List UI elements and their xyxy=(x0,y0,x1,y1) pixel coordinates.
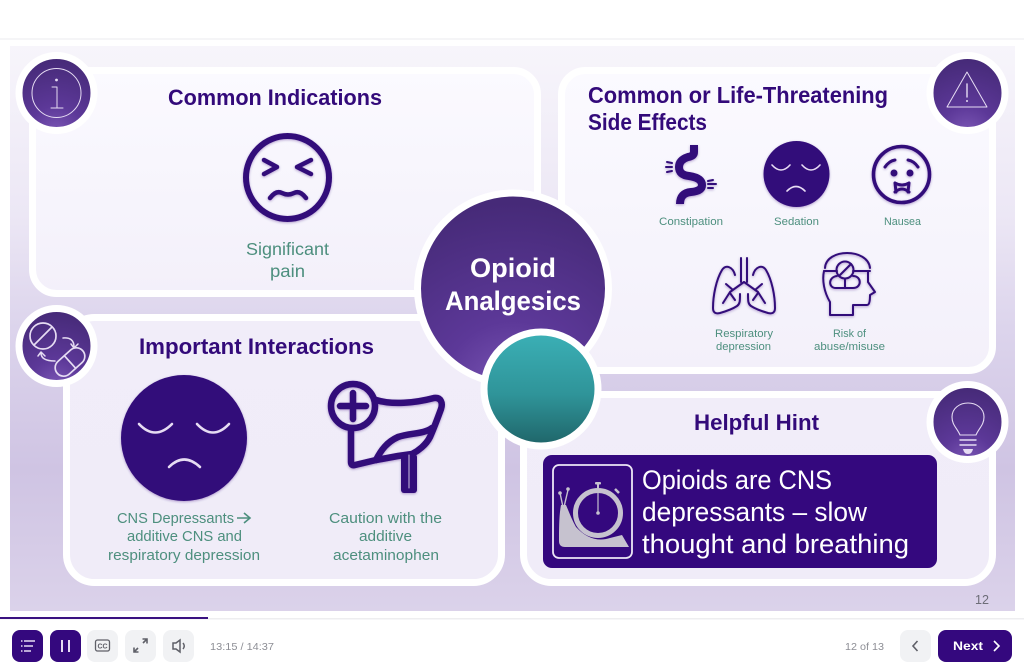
callout: hint box xyxy=(543,455,937,568)
button: next xyxy=(938,630,1012,662)
text: hint: thought and breathing xyxy=(642,529,909,559)
icon: liver with plus xyxy=(331,384,442,493)
text: CNS depressants xyxy=(108,510,260,564)
panel: helpful hint xyxy=(524,394,992,582)
text: acetaminophen caution: additive xyxy=(359,528,412,545)
heading: common indications: Common Indications xyxy=(168,85,382,110)
icon: pain face xyxy=(246,136,329,219)
text: significant pain: Significant xyxy=(246,239,329,259)
icon badge: information xyxy=(19,56,94,130)
labels: side effects xyxy=(659,216,922,353)
button: fullscreen xyxy=(125,630,156,662)
player controls xyxy=(12,630,1012,662)
heading: side effects xyxy=(588,82,888,135)
button: captions xyxy=(87,630,118,662)
top divider xyxy=(0,38,1024,40)
heading: helpful hint: Helpful Hint xyxy=(694,410,820,435)
panel: common indications xyxy=(32,70,538,294)
text: acetaminophen caution: acetaminophen xyxy=(333,547,439,564)
button: pause xyxy=(50,630,81,662)
icon badge: warning xyxy=(930,56,1005,130)
text: hint: Opioids are CNS xyxy=(642,465,832,495)
labels: side effects: Nausea xyxy=(884,216,922,228)
text: CNS depressants: CNS Depressants xyxy=(117,510,234,527)
icon badge: light bulb xyxy=(930,384,1005,460)
text: acetaminophen caution: Caution with the xyxy=(329,510,442,527)
text: significant pain: pain xyxy=(270,261,305,281)
labels: side effects: Risk of xyxy=(833,328,867,340)
button: previous xyxy=(900,630,931,662)
central circle: opioid analgesics xyxy=(418,193,608,384)
labels: side effects: Sedation xyxy=(774,216,819,228)
page counter: 12 of 13 xyxy=(845,641,884,653)
labels: side effects: Constipation xyxy=(659,216,723,228)
icon: lungs xyxy=(713,258,775,313)
teal circle xyxy=(484,332,598,446)
icon: snail stopwatch xyxy=(553,465,632,558)
button: next: Next xyxy=(953,639,983,653)
text: hint: depressants – slow xyxy=(642,497,868,527)
icon: sedation face xyxy=(764,141,830,207)
text: CNS depressants: respiratory depression xyxy=(108,547,260,564)
labels: side effects: Respiratory xyxy=(715,328,774,340)
button: menu xyxy=(12,630,43,662)
text: acetaminophen caution xyxy=(329,510,442,564)
panel: side effects xyxy=(562,70,992,370)
button: volume xyxy=(163,630,194,662)
timer: 13:15 / 14:37 xyxy=(210,641,274,653)
labels: side effects: depression xyxy=(716,341,771,353)
labels: side effects: abuse/misuse xyxy=(814,341,885,353)
heading: side effects: Common or Life-Threatening xyxy=(588,82,888,108)
slide number: 12 xyxy=(975,592,989,607)
panel: important interactions xyxy=(66,318,502,582)
central circle: opioid analgesics: Opioid xyxy=(470,253,556,283)
heading: important interactions: Important Interactions xyxy=(139,334,374,359)
text: significant pain xyxy=(246,239,329,281)
icon: constipation xyxy=(666,145,716,204)
heading: side effects: Side Effects xyxy=(588,109,707,135)
text: CNS depressants: additive CNS and xyxy=(127,528,242,545)
icon: head with pills xyxy=(823,253,875,315)
text: hint xyxy=(642,465,909,559)
icon: nausea face xyxy=(874,146,930,202)
progress bar xyxy=(0,617,1024,620)
button: captions: CC xyxy=(98,644,108,650)
icon: CNS depressant face xyxy=(121,375,247,501)
central circle: opioid analgesics: Analgesics xyxy=(445,286,581,316)
icon badge: drug interactions xyxy=(19,308,94,384)
